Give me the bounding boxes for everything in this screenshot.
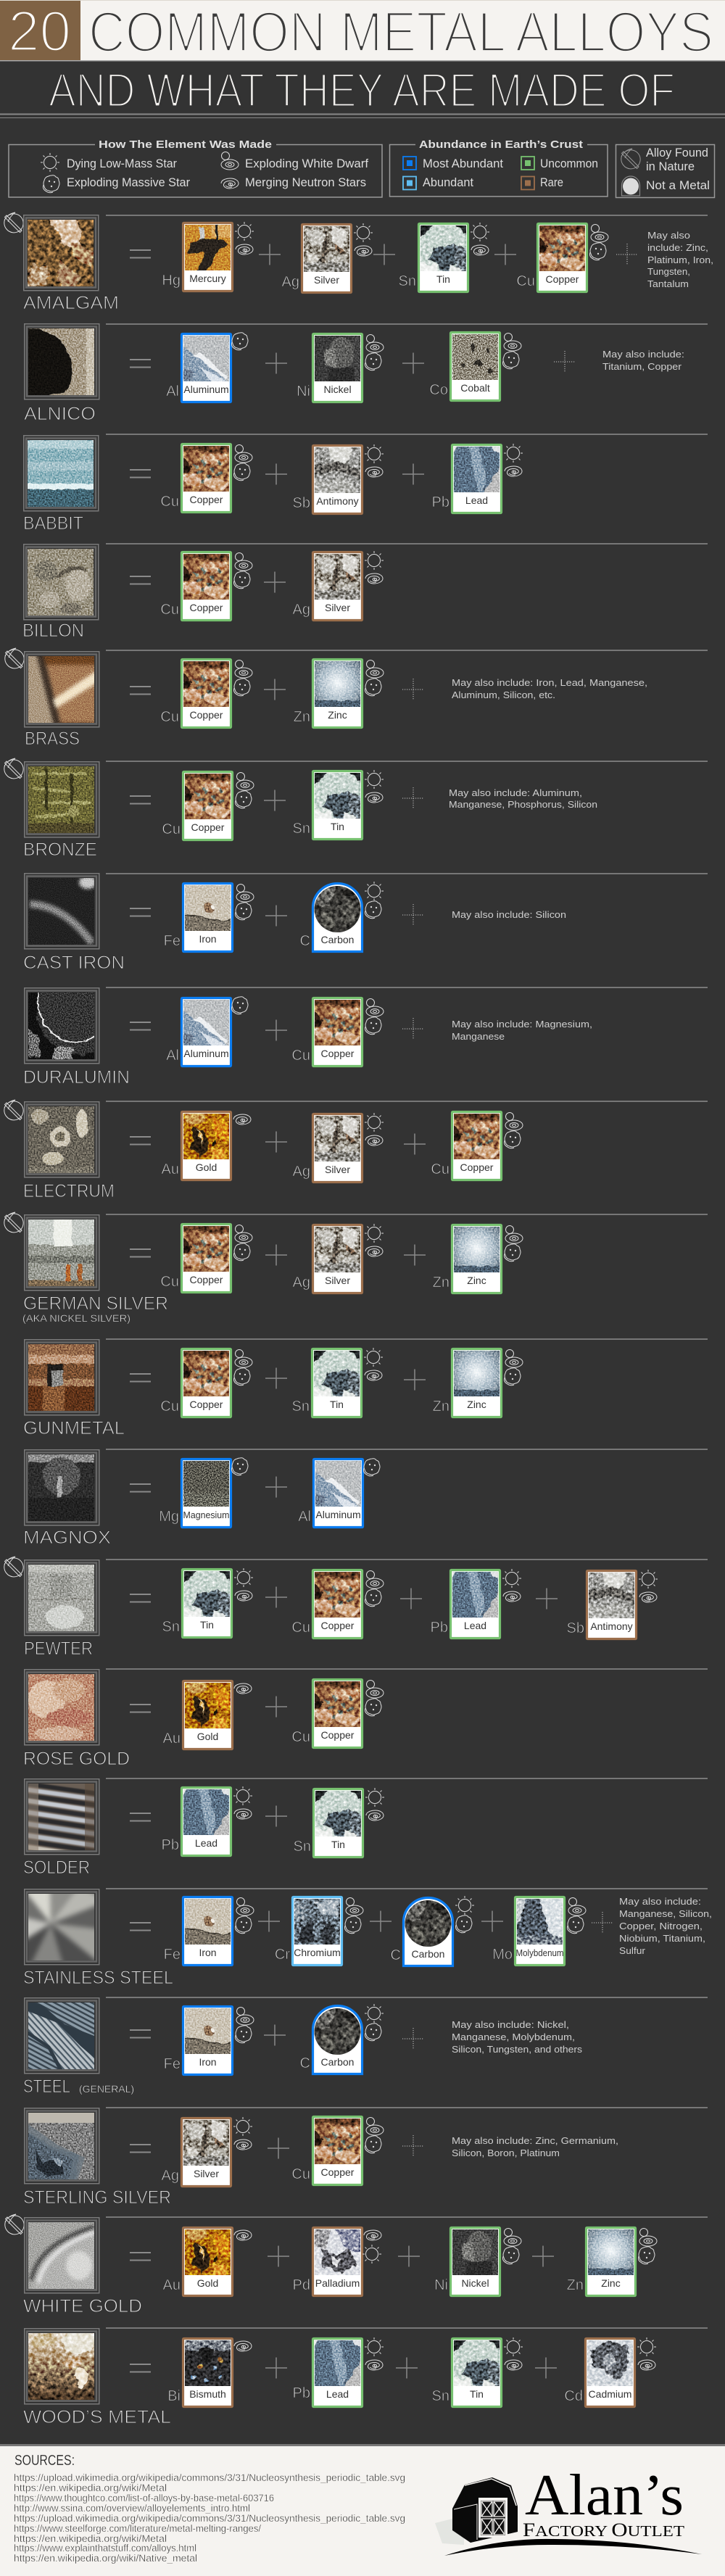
card: Lead: Lead bbox=[326, 2388, 349, 2400]
card: Copper: Cu bbox=[162, 821, 181, 837]
may also include bbox=[619, 1896, 712, 1956]
card: Antimony bbox=[567, 1564, 658, 1639]
may also include bbox=[452, 2019, 583, 2055]
card: Silver: Ag bbox=[162, 2168, 179, 2184]
card: Tin: Sn bbox=[292, 1399, 310, 1415]
legend: abundance in earth's crust: Rare bbox=[540, 176, 563, 189]
source list: https://upload.wikimedia.org/wikipedia/commons/3/31/Nucleosynthesis_periodic_table.svg bbox=[14, 2472, 405, 2483]
card: Copper bbox=[291, 991, 384, 1066]
card: Zinc: Zinc bbox=[467, 1275, 486, 1286]
card: Copper bbox=[160, 437, 252, 512]
row: Alnico bbox=[17, 318, 708, 424]
card: Zinc: Zinc bbox=[601, 2277, 621, 2289]
may also include bbox=[452, 1019, 592, 1042]
card: Carbon bbox=[300, 1999, 384, 2074]
card: Aluminum: Aluminum bbox=[183, 384, 229, 395]
card: Cadmium bbox=[564, 2332, 656, 2407]
card: Bismuth: Bismuth bbox=[189, 2388, 226, 2400]
row: Gunmetal bbox=[17, 1333, 708, 1438]
card: Tin bbox=[162, 1562, 253, 1637]
tagline: FACTORY OUTLET bbox=[523, 2519, 684, 2540]
may also include: include: Zinc, bbox=[647, 242, 708, 253]
source list: https://upload.wikimedia.org/wikipedia/commons/3/31/Nucleosynthesis_periodic_table.svg bbox=[14, 2513, 405, 2524]
thumbnail: rose gold bbox=[17, 1663, 105, 1752]
card: Copper bbox=[160, 1342, 252, 1417]
card: Tin bbox=[292, 1342, 383, 1417]
card: Magnesium: Magnesium bbox=[183, 1509, 229, 1520]
card: Mercury: Hg bbox=[162, 273, 181, 289]
legend: abundance in earth's crust: Uncommon bbox=[540, 157, 598, 170]
card: Lead: Pb bbox=[431, 1620, 448, 1636]
thumbnail: duralumin bbox=[17, 968, 124, 1070]
row: Cast Iron bbox=[17, 867, 708, 973]
card: Copper: Copper bbox=[321, 1620, 355, 1631]
row: Sterling Silver bbox=[21, 2107, 708, 2208]
card: Zinc bbox=[433, 1342, 523, 1417]
card: Aluminum bbox=[166, 991, 248, 1066]
card: Iron: Fe bbox=[164, 2056, 181, 2072]
card: Lead: Pb bbox=[432, 494, 450, 510]
alloy name: STERLING SILVER bbox=[23, 2187, 171, 2208]
card: Molybdenum: Mo bbox=[492, 1947, 513, 1963]
card: Zinc bbox=[433, 1218, 523, 1293]
row: Magnox bbox=[17, 1444, 708, 1548]
card: Cadmium: Cd bbox=[564, 2388, 583, 2404]
icon: barn bbox=[435, 2477, 518, 2545]
card: Tin bbox=[399, 217, 489, 291]
card: Magnesium bbox=[159, 1452, 248, 1527]
alloy name: BILLON bbox=[22, 621, 84, 641]
may also include: May also include: Nickel, bbox=[452, 2019, 569, 2030]
card: Carbon bbox=[300, 877, 384, 951]
card: Copper bbox=[162, 765, 254, 840]
row: Billon bbox=[17, 538, 708, 641]
card: Aluminum bbox=[166, 327, 248, 402]
thumbnail: amalgam bbox=[17, 209, 104, 297]
source list bbox=[14, 2472, 405, 2564]
card: Tin: Tin bbox=[200, 1619, 214, 1631]
card: Tin: Tin bbox=[470, 2388, 484, 2400]
row: Rose Gold bbox=[17, 1663, 708, 1769]
row: Solder bbox=[23, 1778, 708, 1878]
card: Copper bbox=[291, 1673, 384, 1747]
card: Silver bbox=[162, 2111, 252, 2187]
card: Copper: Copper bbox=[190, 1399, 223, 1410]
card: Antimony: Antimony bbox=[316, 495, 359, 507]
wordmark: Alan’s bbox=[525, 2464, 684, 2527]
alloy name: DURALUMIN bbox=[23, 1067, 130, 1088]
card: Copper bbox=[160, 1217, 252, 1292]
legend: alloy found in nature and not a metal: Alloy Found bbox=[646, 146, 708, 160]
alloy qualifier: (GENERAL) bbox=[79, 2083, 134, 2095]
card: Zinc: Zn bbox=[567, 2277, 584, 2293]
card: Iron: Iron bbox=[199, 933, 217, 945]
card: Aluminum: Aluminum bbox=[183, 1048, 229, 1059]
alloy name: CAST IRON bbox=[23, 953, 125, 973]
may also include: May also include: Aluminum, bbox=[449, 787, 582, 798]
swoosh bbox=[444, 2539, 702, 2556]
may also include: Silicon, Boron, Platinum bbox=[452, 2148, 560, 2158]
card: Copper: Copper bbox=[190, 1274, 223, 1285]
card: Copper: Copper bbox=[546, 273, 579, 285]
card: Antimony: Antimony bbox=[590, 1620, 633, 1632]
card: Silver: Silver bbox=[325, 1275, 350, 1286]
thumbnail: solder bbox=[25, 1779, 99, 1858]
card: Zinc: Zinc bbox=[467, 1399, 486, 1410]
card: Tin: Sn bbox=[432, 2388, 450, 2404]
card: Aluminum: Al bbox=[166, 1048, 179, 1064]
card: Silver: Ag bbox=[293, 602, 310, 618]
card: Nickel bbox=[434, 2221, 521, 2295]
card: Lead bbox=[293, 2332, 384, 2407]
legend: abundance in earth's crust: Abundance in Earth’s Crust bbox=[419, 138, 583, 151]
row: Steel (General) bbox=[23, 1997, 708, 2097]
thumbnail: electrum bbox=[17, 1096, 105, 1185]
source list: https://www.steelforge.com/literature/metal-melting-ranges/ bbox=[14, 2523, 261, 2534]
may also include: Manganese bbox=[452, 1031, 505, 1042]
legend: abundance in earth's crust bbox=[390, 138, 608, 196]
card: Lead bbox=[432, 438, 523, 513]
source list: http://www.ssina.com/overview/alloyelements_intro.html bbox=[14, 2503, 250, 2514]
may also include bbox=[452, 677, 647, 700]
thumbnail: bronze bbox=[17, 755, 105, 845]
row: German Silver bbox=[4, 1209, 708, 1324]
card: Copper bbox=[291, 2110, 384, 2185]
alloy name: WHITE GOLD bbox=[23, 2296, 142, 2316]
thumbnail: sterling silver bbox=[21, 2108, 99, 2192]
source list: https://www.explainthatstuff.com/alloys.html bbox=[14, 2543, 196, 2554]
thumbnail: pewter bbox=[17, 1554, 105, 1642]
legend: how the element was made: How The Element Was Made bbox=[99, 138, 272, 151]
card: Bismuth: Bi bbox=[167, 2388, 181, 2404]
card: Gold bbox=[162, 1105, 251, 1180]
card: Mercury: Mercury bbox=[189, 273, 226, 284]
may also include: Manganese, Molybdenum, bbox=[452, 2032, 575, 2042]
card: Gold bbox=[163, 2221, 252, 2295]
card: Gold: Au bbox=[162, 1161, 179, 1177]
card: Silver: Ag bbox=[293, 1164, 310, 1180]
card: Iron bbox=[164, 2000, 254, 2075]
legend: alloy found in nature and not a metal: in Nature bbox=[646, 160, 695, 173]
source list: https://en.wikipedia.org/wiki/Native_metal bbox=[14, 2553, 197, 2564]
card: Aluminum: Al bbox=[166, 384, 179, 399]
card: Tin bbox=[293, 764, 384, 840]
card: Zinc: Zn bbox=[433, 1399, 450, 1415]
source list: https://en.wikipedia.org/wiki/Metal bbox=[14, 2533, 167, 2544]
card: Lead: Pb bbox=[293, 2385, 310, 2401]
card: Lead bbox=[162, 1781, 252, 1856]
card: Silver: Silver bbox=[325, 1164, 350, 1175]
alloy name: ROSE GOLD bbox=[23, 1749, 130, 1769]
footer panel bbox=[0, 2444, 725, 2576]
card: Copper bbox=[291, 1563, 384, 1639]
legend: how the element was made: Dying Low-Mass Star bbox=[67, 157, 177, 170]
legend: alloy found in nature and not a metal: Not a Metal bbox=[646, 179, 710, 192]
card: Iron bbox=[164, 1890, 254, 1965]
card: Lead: Lead bbox=[464, 1620, 486, 1631]
card: Silver bbox=[293, 1107, 384, 1182]
card: Tin: Tin bbox=[330, 1399, 344, 1410]
row: White Gold bbox=[5, 2211, 708, 2316]
may also include bbox=[602, 349, 684, 372]
thumbnail: german silver bbox=[17, 1209, 105, 1298]
may also include: Copper, Nitrogen, bbox=[619, 1921, 703, 1931]
card: Copper: Cu bbox=[160, 1399, 179, 1415]
heading: 20: 20 bbox=[8, 0, 71, 63]
card: Carbon: Carbon bbox=[321, 934, 354, 945]
source list: https://en.wikipedia.org/wiki/Metal bbox=[14, 2482, 167, 2493]
card: Carbon: C bbox=[391, 1947, 401, 1963]
card: Zinc: Zn bbox=[433, 1275, 450, 1291]
card: Carbon bbox=[391, 1891, 474, 1966]
may also include: Aluminum, Silicon, etc. bbox=[452, 689, 555, 700]
may also include: Sulfur bbox=[619, 1945, 646, 1956]
card: Aluminum: Al bbox=[298, 1509, 311, 1525]
thumbnail: stainless steel bbox=[17, 1887, 108, 1970]
alloy name: PEWTER bbox=[24, 1639, 93, 1659]
card: Bismuth bbox=[167, 2332, 252, 2407]
card: Silver bbox=[282, 218, 373, 293]
alloy alternate name: (AKA NICKEL SILVER) bbox=[22, 1312, 130, 1324]
thumbnail: white gold bbox=[17, 2211, 105, 2300]
card: Nickel: Ni bbox=[297, 384, 310, 399]
alloy name: SOLDER bbox=[23, 1858, 90, 1878]
card: Copper: Cu bbox=[160, 709, 179, 725]
header band bbox=[0, 0, 725, 64]
brown number box bbox=[0, 1, 80, 60]
card: Nickel bbox=[297, 327, 384, 402]
card: Zinc: Zn bbox=[294, 709, 310, 725]
may also include bbox=[452, 2135, 618, 2158]
card: Magnesium: Mg bbox=[159, 1509, 179, 1525]
card: Iron bbox=[164, 877, 254, 951]
row: Amalgam bbox=[4, 209, 713, 313]
card: Iron: Iron bbox=[199, 1947, 217, 1958]
may also include bbox=[647, 230, 713, 289]
card: Tin bbox=[294, 1782, 384, 1858]
card: Copper: Cu bbox=[291, 1729, 310, 1745]
row: Bronze bbox=[4, 755, 708, 860]
legend: abundance in earth's crust: Most Abundant bbox=[423, 157, 503, 170]
card: Carbon: C bbox=[300, 933, 310, 949]
thumbnail: brass bbox=[17, 645, 105, 734]
row: Wood's Metal bbox=[17, 2322, 708, 2427]
logo: Alan's Factory Outlet bbox=[435, 2464, 702, 2556]
card: Iron: Fe bbox=[164, 933, 181, 949]
card: Tin: Sn bbox=[293, 821, 310, 837]
card: Silver: Silver bbox=[325, 602, 350, 613]
alloy name: AMALGAM bbox=[23, 293, 119, 313]
may also include: Tungsten, bbox=[647, 266, 690, 277]
card: Aluminum: Aluminum bbox=[315, 1509, 361, 1520]
card: Lead: Lead bbox=[465, 494, 488, 506]
card: Copper: Cu bbox=[291, 2166, 310, 2182]
card: Molybdenum bbox=[492, 1890, 586, 1965]
card: Gold: Gold bbox=[196, 1161, 217, 1173]
card: Silver: Ag bbox=[282, 274, 299, 290]
thumbnail: alnico bbox=[17, 318, 105, 406]
thumbnail: billon bbox=[17, 538, 104, 626]
card: Iron: Fe bbox=[164, 1947, 181, 1963]
card: Silver: Silver bbox=[194, 2168, 219, 2179]
card: Copper bbox=[160, 653, 252, 728]
card: Copper: Copper bbox=[321, 1729, 355, 1741]
may also include: Tantalum bbox=[647, 278, 689, 289]
card: Zinc bbox=[567, 2221, 657, 2295]
card: Cobalt bbox=[429, 326, 521, 400]
thumbnail: babbit bbox=[17, 429, 104, 518]
card: Gold: Au bbox=[163, 1731, 181, 1747]
legend: abundance in earth's crust: Abundant bbox=[423, 176, 473, 189]
card: Nickel: Nickel bbox=[323, 384, 352, 395]
card: Gold bbox=[163, 1674, 252, 1749]
card: Iron: Iron bbox=[199, 2056, 217, 2068]
legend: how the element was made: Exploding White Dwarf bbox=[245, 157, 368, 170]
card: Copper: Copper bbox=[321, 2166, 355, 2178]
legend: how the element was made: Merging Neutron Stars bbox=[245, 176, 366, 189]
card: Carbon: Carbon bbox=[412, 1948, 444, 1960]
card: Lead bbox=[431, 1563, 521, 1639]
may also include: May also include: Silicon bbox=[452, 909, 566, 920]
card: Copper: Cu bbox=[291, 1620, 310, 1636]
card: Tin: Sn bbox=[294, 1839, 311, 1855]
may also include bbox=[449, 787, 597, 810]
card: Copper: Copper bbox=[460, 1161, 494, 1173]
card: Tin: Sn bbox=[162, 1619, 180, 1635]
may also include: Platinum, Iron, bbox=[647, 254, 713, 265]
card: Copper: Cu bbox=[291, 1048, 310, 1064]
card: Chromium: Cr bbox=[275, 1947, 290, 1963]
alloy name: STEEL bbox=[23, 2076, 70, 2097]
alloy name: GERMAN SILVER bbox=[23, 1293, 168, 1314]
card: Carbon: Carbon bbox=[321, 2056, 354, 2068]
card: Antimony: Sb bbox=[567, 1620, 584, 1636]
may also include: May also include: Iron, Lead, Manganese, bbox=[452, 677, 647, 688]
card: Gold: Gold bbox=[197, 1731, 218, 1742]
card: Lead: Pb bbox=[162, 1837, 179, 1853]
thumbnail: wood's metal bbox=[17, 2322, 105, 2411]
card: Silver bbox=[293, 545, 384, 621]
card: Copper: Cu bbox=[160, 494, 179, 510]
alloy name: BRONZE bbox=[23, 840, 97, 860]
card: Antimony: Sb bbox=[293, 495, 310, 511]
card: Chromium: Chromium bbox=[294, 1947, 341, 1958]
card: Copper: Cu bbox=[431, 1161, 450, 1177]
may also include: Manganese, Phosphorus, Silicon bbox=[449, 799, 597, 810]
card: Copper: Cu bbox=[516, 273, 535, 289]
card: Copper: Copper bbox=[191, 821, 225, 833]
card: Nickel: Nickel bbox=[461, 2277, 489, 2289]
card: Aluminum bbox=[298, 1452, 380, 1527]
thumbnail: steel bbox=[25, 1998, 99, 2074]
card: Copper: Copper bbox=[190, 602, 223, 613]
card: Cobalt: Co bbox=[429, 382, 448, 398]
alloy name: ELECTRUM bbox=[23, 1181, 115, 1201]
row: Babbit bbox=[17, 429, 708, 534]
legend: how the element was made: Exploding Massive Star bbox=[67, 176, 190, 189]
thumbnail: magnox bbox=[17, 1444, 105, 1533]
card: Tin: Tin bbox=[331, 1839, 345, 1850]
alloy name: ALNICO bbox=[24, 404, 96, 424]
card: Tin: Sn bbox=[399, 273, 416, 289]
card: Mercury bbox=[162, 216, 254, 291]
alloy name: BRASS bbox=[25, 729, 80, 749]
card: Gold: Au bbox=[163, 2277, 181, 2293]
alloy name: GUNMETAL bbox=[23, 1418, 125, 1438]
card: Carbon: C bbox=[300, 2055, 310, 2071]
card: Silver bbox=[293, 1218, 384, 1293]
card: Tin: Tin bbox=[436, 273, 450, 285]
card: Silver: Silver bbox=[314, 274, 339, 286]
card: Nickel: Ni bbox=[434, 2277, 448, 2293]
may also include: Titanium, Copper bbox=[602, 361, 682, 372]
row: Brass bbox=[5, 645, 708, 749]
card: Copper bbox=[160, 545, 252, 621]
may also include: May also include: Magnesium, bbox=[452, 1019, 592, 1030]
card: Palladium: Pd bbox=[293, 2277, 310, 2293]
card: Silver: Ag bbox=[293, 1275, 310, 1291]
thumbnail: gunmetal bbox=[17, 1333, 105, 1422]
alloy name: MAGNOX bbox=[23, 1528, 111, 1548]
card: Cobalt: Cobalt bbox=[460, 382, 490, 394]
may also include: Silicon, Tungsten, and others bbox=[452, 2044, 583, 2055]
alloy name: BABBIT bbox=[23, 513, 83, 534]
card: Copper: Cu bbox=[160, 602, 179, 618]
card: Copper: Copper bbox=[321, 1048, 355, 1059]
card: Gold: Gold bbox=[197, 2277, 218, 2289]
row: Electrum bbox=[4, 1096, 708, 1201]
source list: https://www.thoughtco.com/list-of-alloys-by-base-metal-603716 bbox=[14, 2493, 274, 2503]
may also include: May also bbox=[647, 230, 690, 241]
card: Copper bbox=[431, 1105, 523, 1180]
row: Pewter bbox=[4, 1554, 708, 1659]
sources heading: SOURCES: bbox=[14, 2453, 75, 2469]
may also include: May also include: bbox=[602, 349, 684, 360]
card: Cadmium: Cadmium bbox=[589, 2388, 631, 2400]
may also include: May also include: bbox=[619, 1896, 701, 1907]
legend: alloy found in nature and not a metal bbox=[616, 145, 715, 197]
row: Duralumin bbox=[17, 968, 708, 1088]
may also include: Manganese, Silicon, bbox=[619, 1908, 712, 1919]
card: Copper bbox=[516, 217, 608, 291]
may also include: May also include: Zinc, Germanium, bbox=[452, 2135, 618, 2146]
card: Tin: Tin bbox=[331, 821, 344, 832]
card: Antimony bbox=[293, 439, 384, 513]
card: Copper: Copper bbox=[190, 494, 223, 505]
card: Zinc bbox=[294, 653, 384, 728]
card: Zinc: Zinc bbox=[328, 709, 347, 721]
alloy name: WOOD’S METAL bbox=[23, 2407, 171, 2427]
thumbnail: cast iron bbox=[17, 867, 105, 956]
row: Stainless Steel bbox=[17, 1887, 712, 1988]
legend: how the element was made bbox=[9, 138, 382, 197]
card: Chromium bbox=[275, 1890, 363, 1965]
card: Palladium: Palladium bbox=[315, 2277, 360, 2289]
card: Palladium bbox=[293, 2221, 381, 2295]
card: Copper: Copper bbox=[190, 709, 223, 721]
alloy name: STAINLESS STEEL bbox=[23, 1968, 173, 1988]
card: Tin bbox=[432, 2332, 523, 2407]
may also include: Niobium, Titanium, bbox=[619, 1933, 705, 1944]
card: Copper: Cu bbox=[160, 1274, 179, 1290]
card: Molybdenum: Molybdenum bbox=[516, 1948, 564, 1958]
card: Lead: Lead bbox=[195, 1837, 218, 1849]
